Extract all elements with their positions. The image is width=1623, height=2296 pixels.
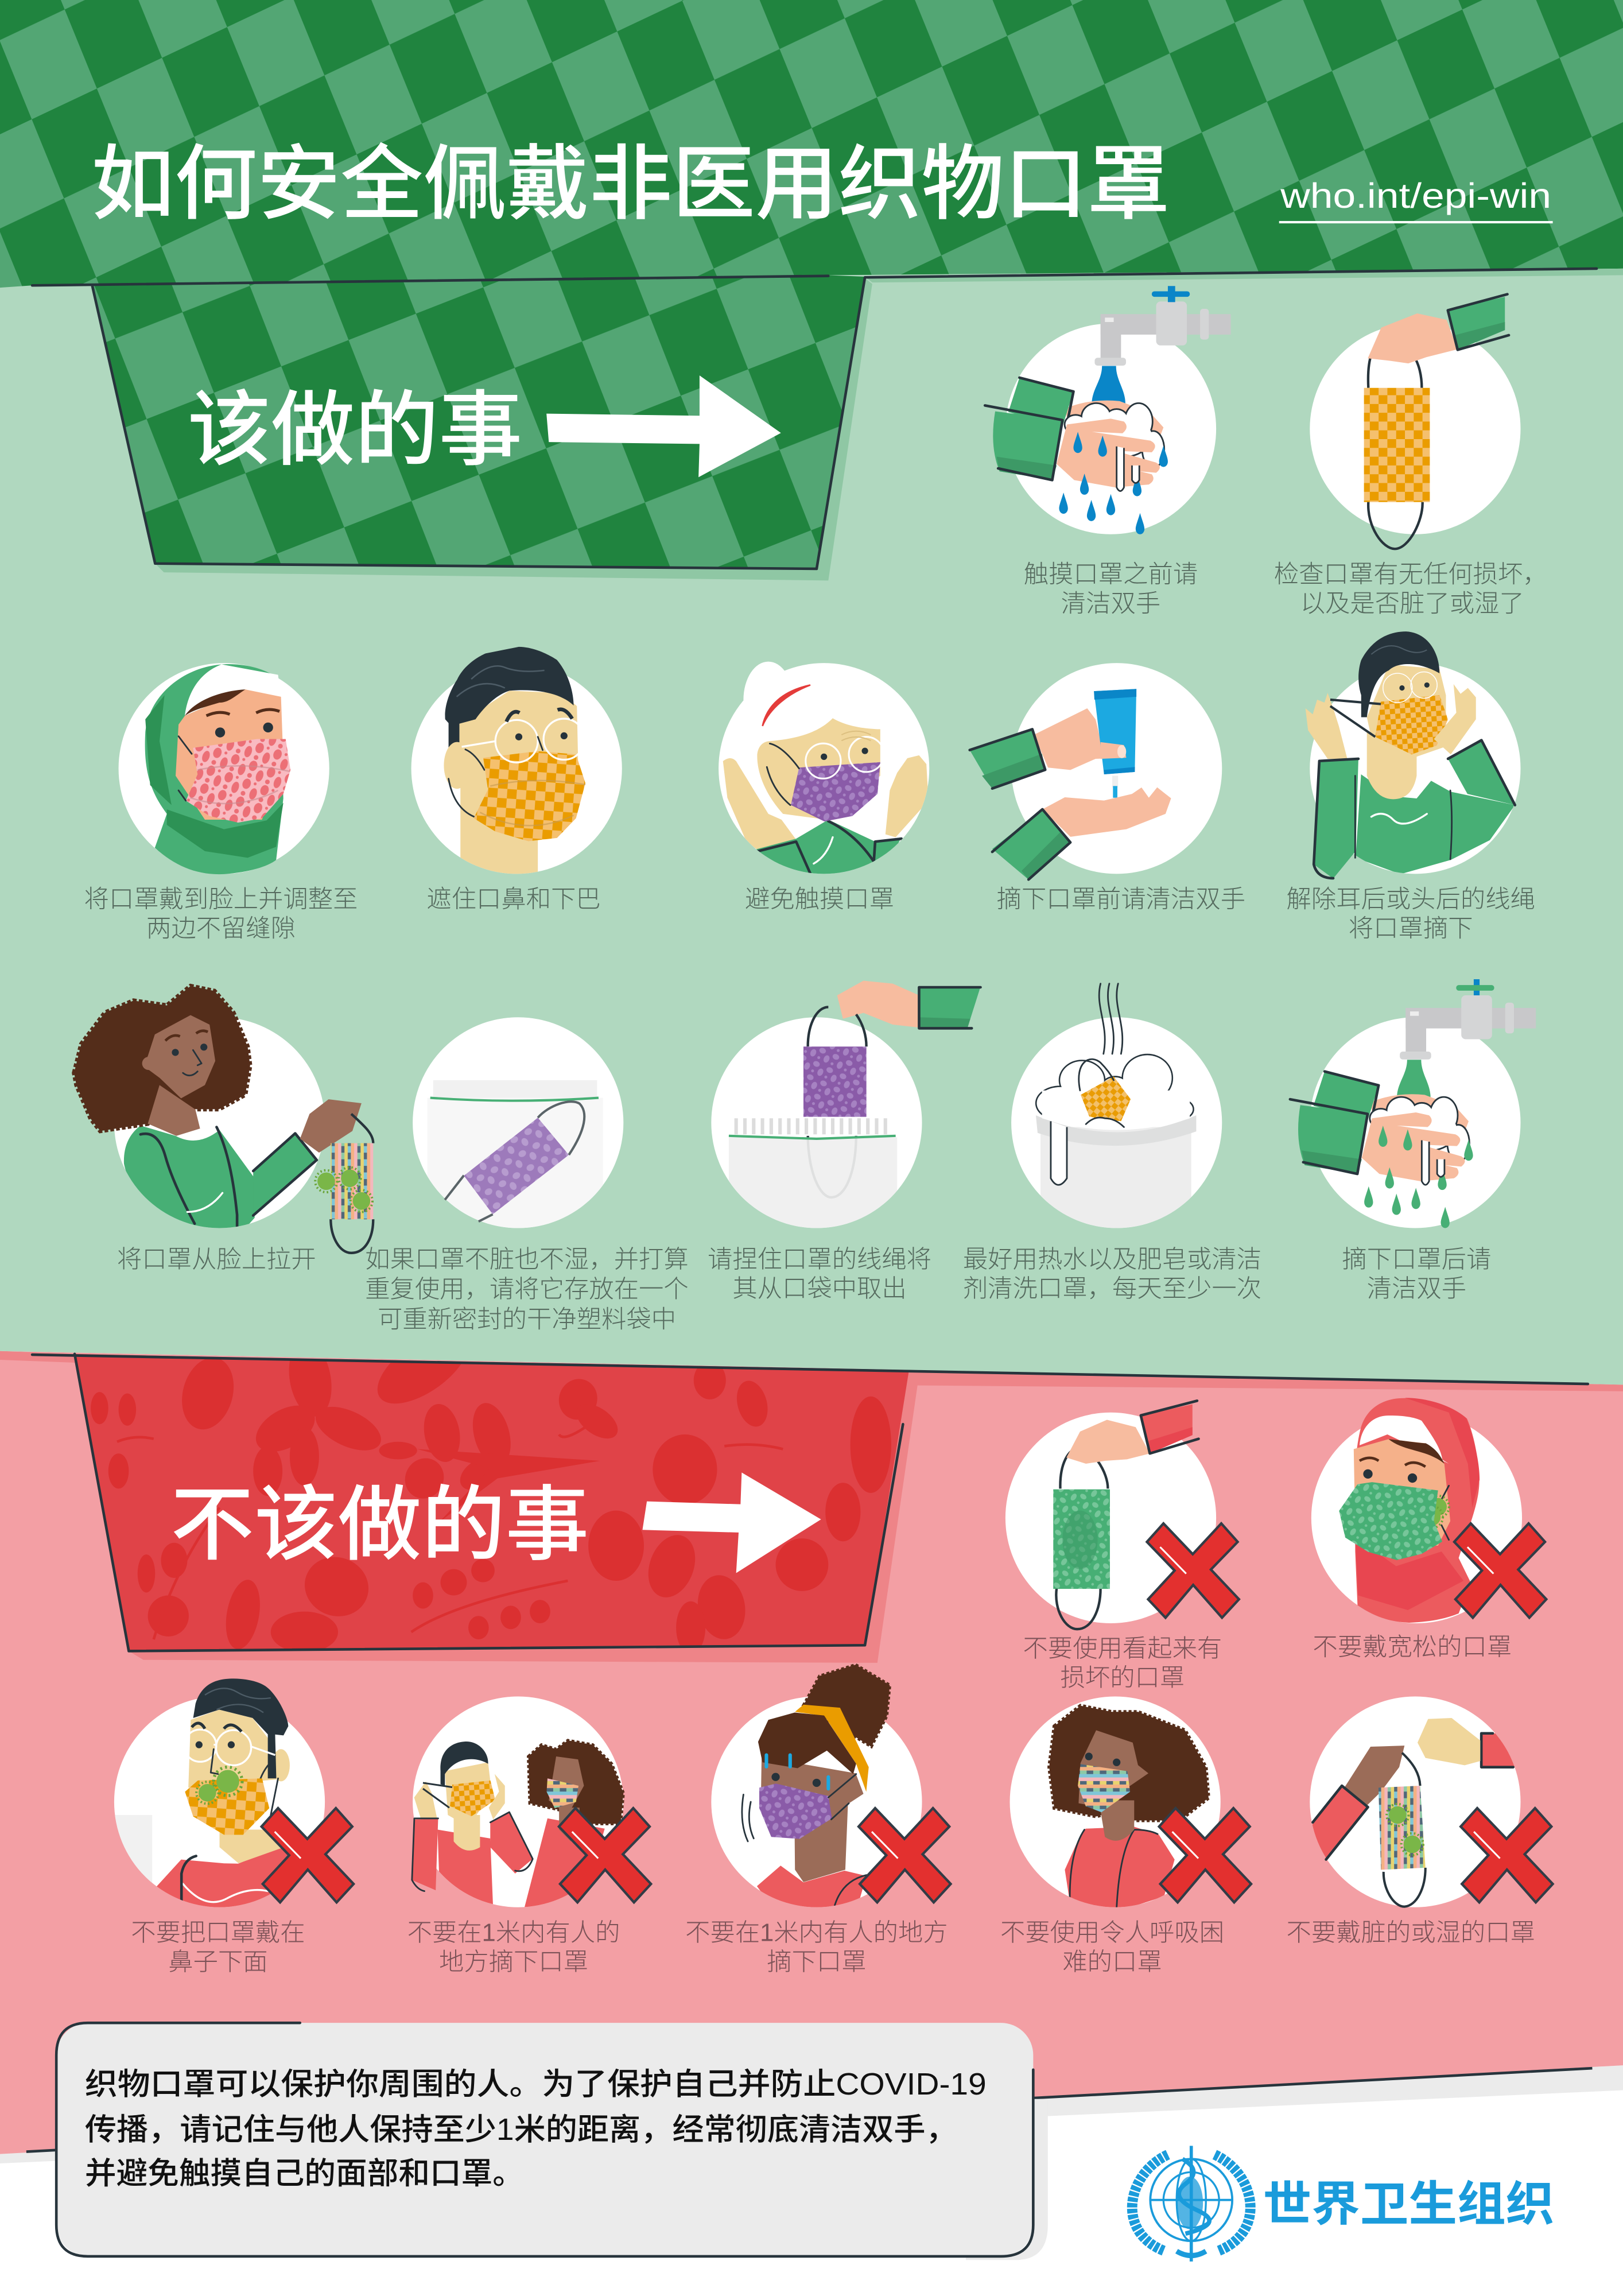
cross: dirty mask bbox=[1461, 1808, 1553, 1902]
caption: 将口罩摘下 bbox=[1349, 915, 1473, 943]
icon: woman pulling mask away bbox=[74, 986, 373, 1253]
panel: don't banner bbox=[31, 1352, 1590, 1663]
title: 如何安全佩戴非医用织物口罩 bbox=[91, 139, 1170, 230]
section: don't background bbox=[0, 1351, 1623, 2154]
icon: hard to breathe mask bbox=[1010, 1697, 1221, 1911]
caption: 遮住口鼻和下巴 bbox=[426, 886, 601, 913]
section: do background bbox=[0, 269, 1623, 1384]
caption: 不要戴脏的或湿的口罩 bbox=[1287, 1919, 1535, 1946]
icon: wash hands before bbox=[985, 286, 1231, 534]
caption: 以及是否脏了或湿了 bbox=[1300, 590, 1524, 618]
icon: removing mask near people bbox=[412, 1697, 623, 1910]
caption: 最好用热水以及肥皂或清洁 bbox=[963, 1246, 1261, 1273]
caption: 不要在1米内有人的 bbox=[407, 1919, 620, 1946]
caption: 鼻子下面 bbox=[168, 1948, 268, 1976]
caption: 重复使用，请将它存放在一个 bbox=[365, 1276, 689, 1304]
caption: 摘下口罩前请清洁双手 bbox=[997, 886, 1245, 913]
cross: coughing bbox=[859, 1808, 951, 1902]
caption: 地方摘下口罩 bbox=[439, 1948, 588, 1976]
caption: 检查口罩有无任何损坏， bbox=[1274, 561, 1548, 588]
caption: 避免触摸口罩 bbox=[745, 886, 894, 913]
icon: mask stored in clean bag bbox=[413, 1017, 623, 1230]
callout: key message: 织物口罩可以保护你周围的人。为了保护自己并防止COVID-19 bbox=[85, 2068, 987, 2101]
caption: 不要戴宽松的口罩 bbox=[1313, 1634, 1512, 1661]
icon: older woman avoid touching mask bbox=[719, 662, 929, 881]
icon: damaged mask bbox=[1005, 1401, 1216, 1629]
caption: 不要使用令人呼吸困 bbox=[1000, 1919, 1224, 1946]
caption: 将口罩从脸上拉开 bbox=[117, 1246, 316, 1273]
caption: 触摸口罩之前请 bbox=[1024, 561, 1198, 588]
caption: 摘下口罩 bbox=[767, 1948, 867, 1976]
icon: man removing ear loops bbox=[1306, 631, 1520, 879]
logo: WHO emblem bbox=[1132, 2146, 1251, 2262]
caption: 剂清洗口罩，每天至少一次 bbox=[963, 1275, 1261, 1302]
icon: wash hands after bbox=[1290, 979, 1536, 1228]
cross: loose mask bbox=[1454, 1523, 1546, 1618]
callout: key message: 并避免触摸自己的面部和口罩。 bbox=[85, 2157, 524, 2191]
cross: under nose bbox=[262, 1808, 354, 1902]
icon: sanitize hands before removal bbox=[970, 663, 1222, 879]
callout: key message bbox=[56, 2023, 1048, 2260]
icon: wash mask in hot soapy water bbox=[1011, 984, 1222, 1230]
cross: damaged mask bbox=[1147, 1523, 1239, 1618]
arrow: do bbox=[546, 375, 781, 477]
caption: 可重新密封的干净塑料袋中 bbox=[378, 1306, 676, 1333]
caption: 解除耳后或头后的线绳 bbox=[1287, 886, 1535, 913]
caption: 摘下口罩后请 bbox=[1342, 1246, 1491, 1273]
caption: 损坏的口罩 bbox=[1061, 1665, 1185, 1692]
icon: coughing woman bbox=[711, 1665, 922, 1911]
caption: 清洁双手 bbox=[1367, 1275, 1466, 1302]
heading: do: 该做的事 bbox=[187, 385, 522, 476]
caption: 其从口袋中取出 bbox=[732, 1275, 907, 1302]
icon: man covering nose and chin bbox=[411, 647, 622, 881]
arrow: don't bbox=[642, 1472, 821, 1573]
caption: 不要使用看起来有 bbox=[1023, 1635, 1222, 1663]
logo: WHO name: 世界卫生组织 bbox=[1263, 2177, 1554, 2231]
caption: 不要在1米内有人的地方 bbox=[685, 1919, 948, 1946]
icon: loose mask bbox=[1311, 1398, 1522, 1623]
caption: 难的口罩 bbox=[1062, 1948, 1162, 1976]
caption: 不要把口罩戴在 bbox=[131, 1919, 305, 1946]
caption: 如果口罩不脏也不湿，并打算 bbox=[365, 1246, 689, 1273]
icon: dirty mask held bbox=[1303, 1697, 1529, 1907]
website link: who.int/epi-win bbox=[1280, 176, 1551, 215]
panel: do banner bbox=[32, 269, 1597, 580]
callout: key message: 传播，请记住与他人保持至少1米的距离，经常彻底清洁双手， bbox=[85, 2113, 957, 2147]
caption: 请捏住口罩的线绳将 bbox=[708, 1246, 931, 1273]
caption: 将口罩戴到脸上并调整至 bbox=[84, 886, 358, 913]
bottom grey shadow band bbox=[0, 2065, 1623, 2163]
icon: inspect mask bbox=[1310, 294, 1520, 549]
heading: don't: 不该做的事 bbox=[170, 1480, 589, 1571]
header shadow band bbox=[865, 269, 1623, 282]
icon: pinch loop to remove from bag bbox=[711, 981, 981, 1240]
icon: mask under nose bbox=[114, 1678, 325, 1918]
cross: removing near people bbox=[559, 1808, 651, 1902]
cross: hard to breathe bbox=[1159, 1808, 1251, 1902]
header checker background bbox=[0, 0, 1623, 288]
caption: 两边不留缝隙 bbox=[146, 915, 296, 943]
icon: hijab woman adjusting mask bbox=[119, 663, 329, 874]
caption: 清洁双手 bbox=[1061, 590, 1160, 618]
